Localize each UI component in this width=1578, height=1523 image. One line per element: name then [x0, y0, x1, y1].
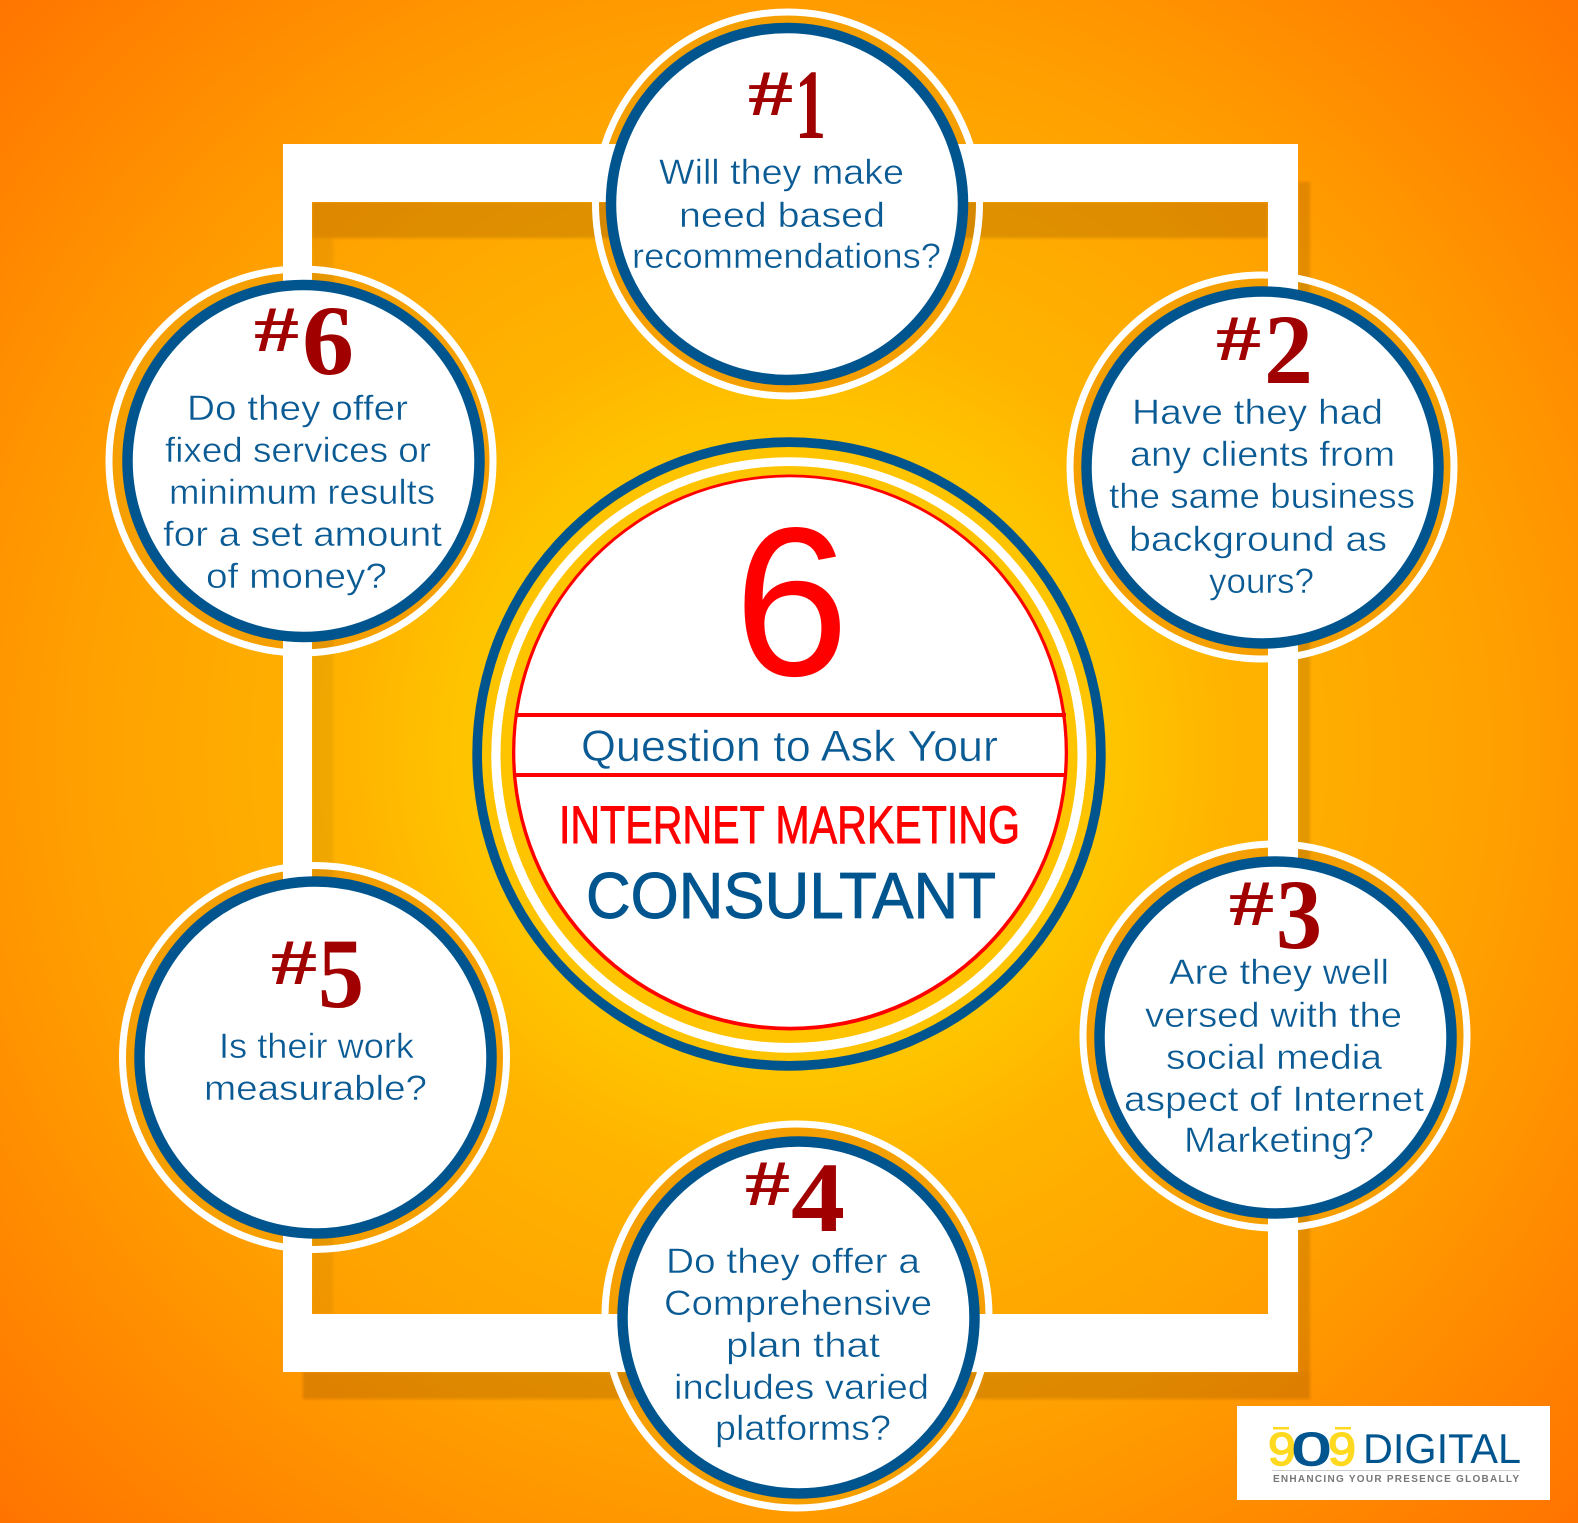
number 3: [1229, 859, 1322, 970]
panel: question 1: [611, 28, 963, 380]
subtitle: Question to Ask Your: [581, 722, 998, 771]
logo: 909 Digital: ENHANCING YOUR PRESENCE GLOBALLY: [1273, 1474, 1519, 1485]
number 3: 3: [1276, 859, 1322, 970]
question text 2: [1109, 393, 1415, 601]
question text 1: need based: [679, 196, 885, 235]
title: consultant: CONSULTANT: [586, 859, 996, 932]
question text 3: [1124, 953, 1424, 1160]
logo: 909 Digital: [1237, 1406, 1550, 1500]
question text 3: social media: [1166, 1038, 1383, 1077]
question text 5: [204, 1027, 427, 1108]
question text 1: Will they make: [659, 153, 904, 192]
question text 1: [632, 153, 941, 276]
panel: question 2: [1086, 292, 1438, 644]
number 6: #: [254, 294, 299, 366]
big numeral 6: 6: [734, 483, 849, 720]
logo: 909 Digital: 9: [1268, 1423, 1296, 1475]
question text 6: for a set amount: [163, 515, 442, 554]
question text 3: Are they well: [1169, 953, 1389, 992]
number 1: #: [748, 58, 793, 130]
panel: question 4: [622, 1142, 974, 1494]
number 1: 1: [795, 49, 826, 160]
number 5: #: [271, 927, 317, 999]
number 5: 5: [318, 918, 364, 1029]
panel: question 6: [128, 285, 480, 637]
logo: 909 Digital: DIGITAL: [1363, 1425, 1521, 1472]
panel: question 5: [140, 882, 492, 1234]
title: internet marketing: INTERNET MARKETING: [559, 796, 1020, 855]
question text 2: Have they had: [1132, 393, 1383, 432]
question text 3: aspect of Internet: [1124, 1080, 1424, 1119]
frame shadow: [303, 182, 1310, 1399]
question text 4: Do they offer a: [666, 1242, 921, 1281]
question text 6: Do they offer: [187, 389, 408, 428]
number 5: [271, 918, 364, 1029]
panel: central title circle: [472, 437, 1106, 1071]
logo: 909 Digital: 0: [1292, 1423, 1331, 1475]
question text 2: background as: [1129, 520, 1387, 559]
logo: 909 Digital: 9: [1328, 1423, 1356, 1475]
question text 2: the same business: [1109, 477, 1415, 516]
question text 6: minimum results: [169, 473, 435, 512]
number 3: #: [1229, 868, 1274, 940]
question text 1: recommendations?: [632, 237, 941, 276]
panel: question 3: [1100, 859, 1452, 1214]
question text 6: fixed services or: [165, 431, 431, 470]
question text 5: Is their work: [219, 1027, 415, 1066]
number 6: 6: [302, 285, 354, 396]
question text 5: measurable?: [204, 1069, 427, 1108]
question text 3: Marketing?: [1184, 1121, 1374, 1160]
number 1: [748, 49, 826, 160]
question text 3: versed with the: [1145, 996, 1402, 1035]
question text 4: Comprehensive: [664, 1284, 932, 1323]
number 6: [254, 285, 354, 396]
white square frame: [283, 144, 1298, 1372]
number 2: #: [1216, 303, 1261, 375]
question text 6: [163, 389, 442, 596]
number 4: [745, 1142, 845, 1253]
number 4: 4: [791, 1142, 845, 1253]
question text 2: any clients from: [1130, 435, 1395, 474]
question text 4: platforms?: [715, 1409, 891, 1448]
number 2: 2: [1264, 294, 1313, 405]
number 2: [1216, 294, 1313, 405]
question text 6: of money?: [206, 557, 387, 596]
number 4: #: [745, 1148, 790, 1220]
question text 4: plan that: [726, 1326, 880, 1365]
question text 4: [664, 1242, 932, 1448]
question text 2: yours?: [1209, 562, 1314, 601]
question text 4: includes varied: [674, 1368, 929, 1407]
